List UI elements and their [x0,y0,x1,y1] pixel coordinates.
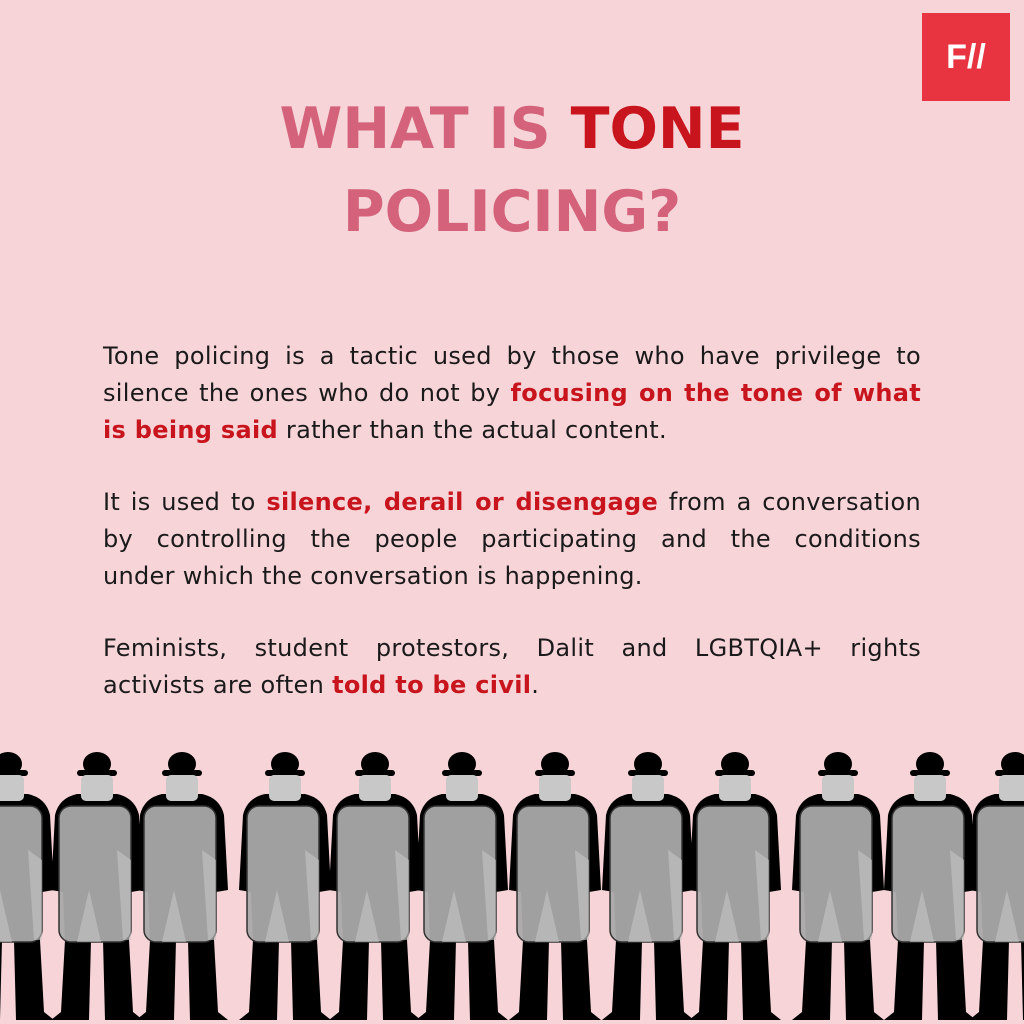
paragraph 2: by controlling the people participating and the conditions [103,525,921,553]
title: POLICING? [343,179,681,245]
paragraph 2: It is used to silence, derail or disengage from a conversation [103,488,921,516]
paragraph 3: activists are often told to be civil. [103,671,539,699]
illustration: row of riot police [0,752,1024,1020]
paragraph 3 [103,634,921,699]
logo: F// [946,38,986,76]
paragraph 1: Tone policing is a tactic used by those who have privilege to [103,342,921,370]
logo [922,13,1010,101]
body text [102,342,921,699]
title [279,96,745,245]
paragraph 3: Feminists, student protestors, Dalit and LGBTQIA+ rights [103,634,921,662]
title: WHAT IS TONE [279,96,745,162]
paragraph 1: silence the ones who do not by focusing on the tone of what [103,379,921,407]
paragraph 1 [102,342,921,444]
paragraph 2: under which the conversation is happening. [103,562,643,590]
police figures [0,752,1024,1020]
paragraph 1: is being said rather than the actual content. [103,416,667,444]
paragraph 2 [103,488,921,590]
